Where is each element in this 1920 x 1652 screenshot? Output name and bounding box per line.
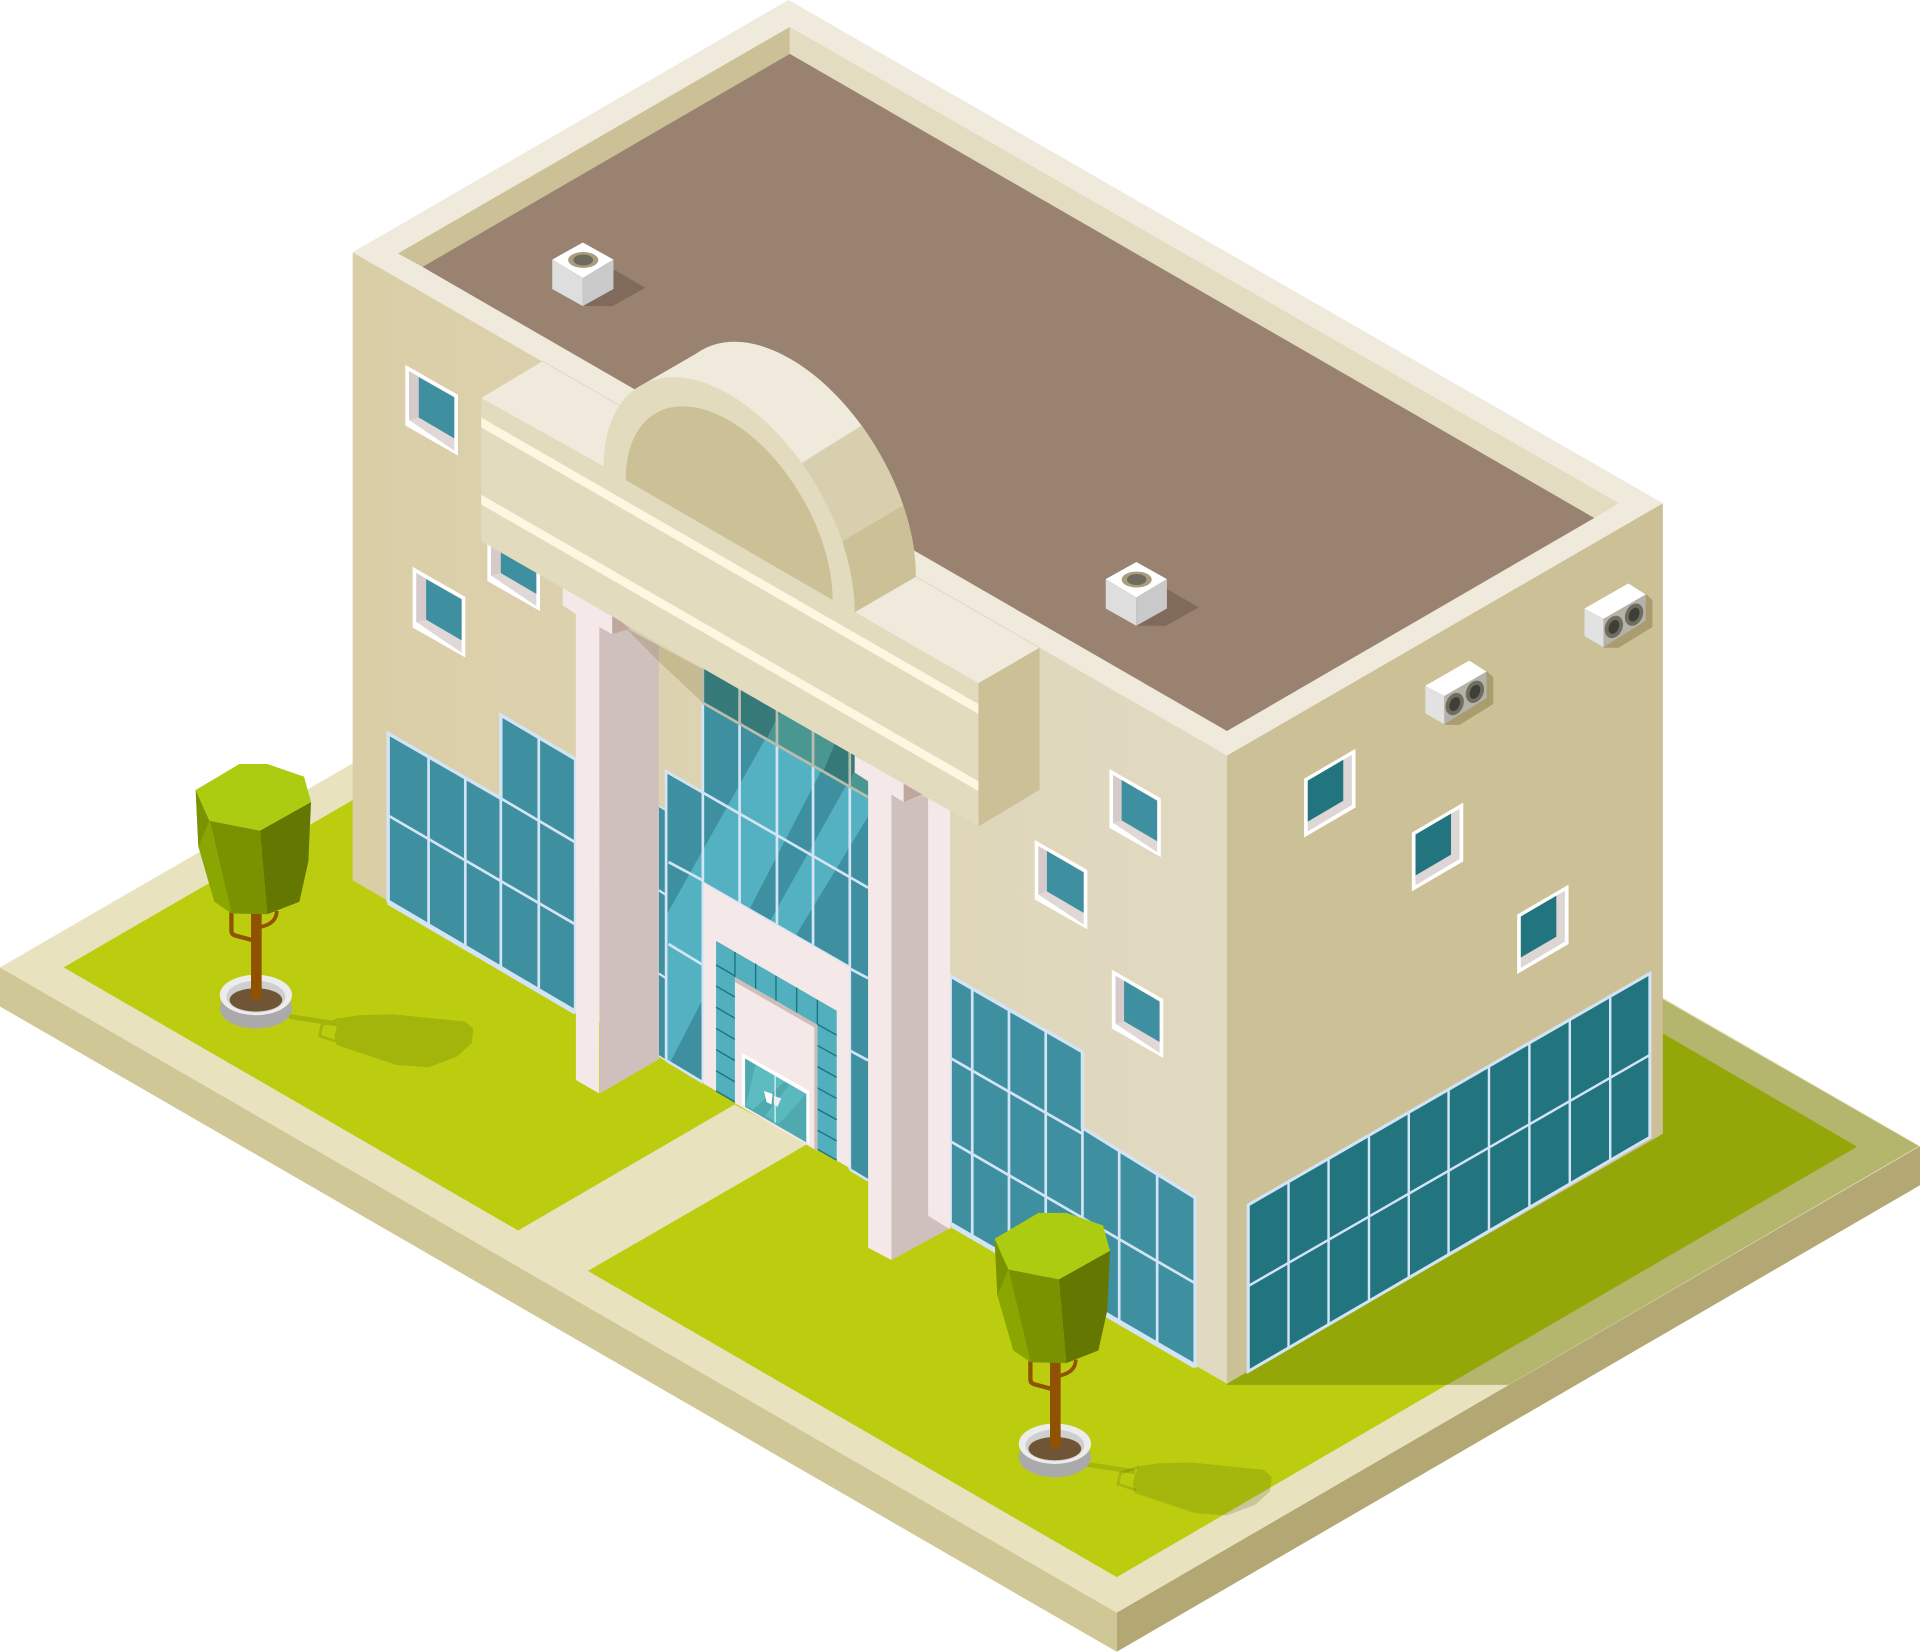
small window left wall 5 (1035, 840, 1087, 929)
right tree (995, 1213, 1110, 1477)
walkway (518, 1104, 808, 1271)
roof (353, 0, 1663, 755)
building walls (353, 252, 1663, 1384)
left column (563, 587, 659, 1093)
small window left wall 4 (1109, 769, 1161, 857)
building shadow on plinth and lawn (1226, 999, 1919, 1385)
glass door (742, 1053, 809, 1144)
canopy side face (978, 648, 1040, 827)
wall AC unit upper (1584, 583, 1652, 648)
small window right wall 2 (1412, 803, 1463, 891)
small window left wall 3 (487, 520, 540, 611)
canopy front face (481, 398, 978, 827)
roof vent unit right (1106, 562, 1199, 626)
central glass curtain wall (658, 668, 868, 1182)
arch front face (604, 377, 855, 612)
plinth base (0, 502, 1920, 1652)
large window left of entrance (388, 715, 576, 1013)
entrance portal (703, 883, 850, 1168)
lawn (64, 539, 1856, 1577)
canopy shadow on wall (626, 628, 702, 702)
canopy stripes (481, 418, 978, 791)
teal panel surround (716, 941, 837, 1160)
shadow of left tree (289, 1014, 473, 1067)
roof vent unit left (552, 242, 645, 306)
large window right of entrance (950, 976, 1195, 1366)
canopy roof rim arch (481, 342, 1040, 683)
left tree (196, 764, 311, 1029)
large window right wall (1248, 973, 1650, 1371)
wall AC unit lower (1425, 661, 1493, 725)
door wall (735, 977, 817, 1151)
shadow of right tree (1087, 1462, 1272, 1515)
small window left wall 6 (1112, 970, 1163, 1058)
arch tympanum (626, 406, 833, 600)
small window left wall 2 (413, 567, 465, 658)
small window left wall 1 (405, 365, 458, 455)
small window right wall 3 (1517, 885, 1569, 974)
right column (855, 755, 950, 1260)
small window right wall 1 (1304, 749, 1356, 838)
